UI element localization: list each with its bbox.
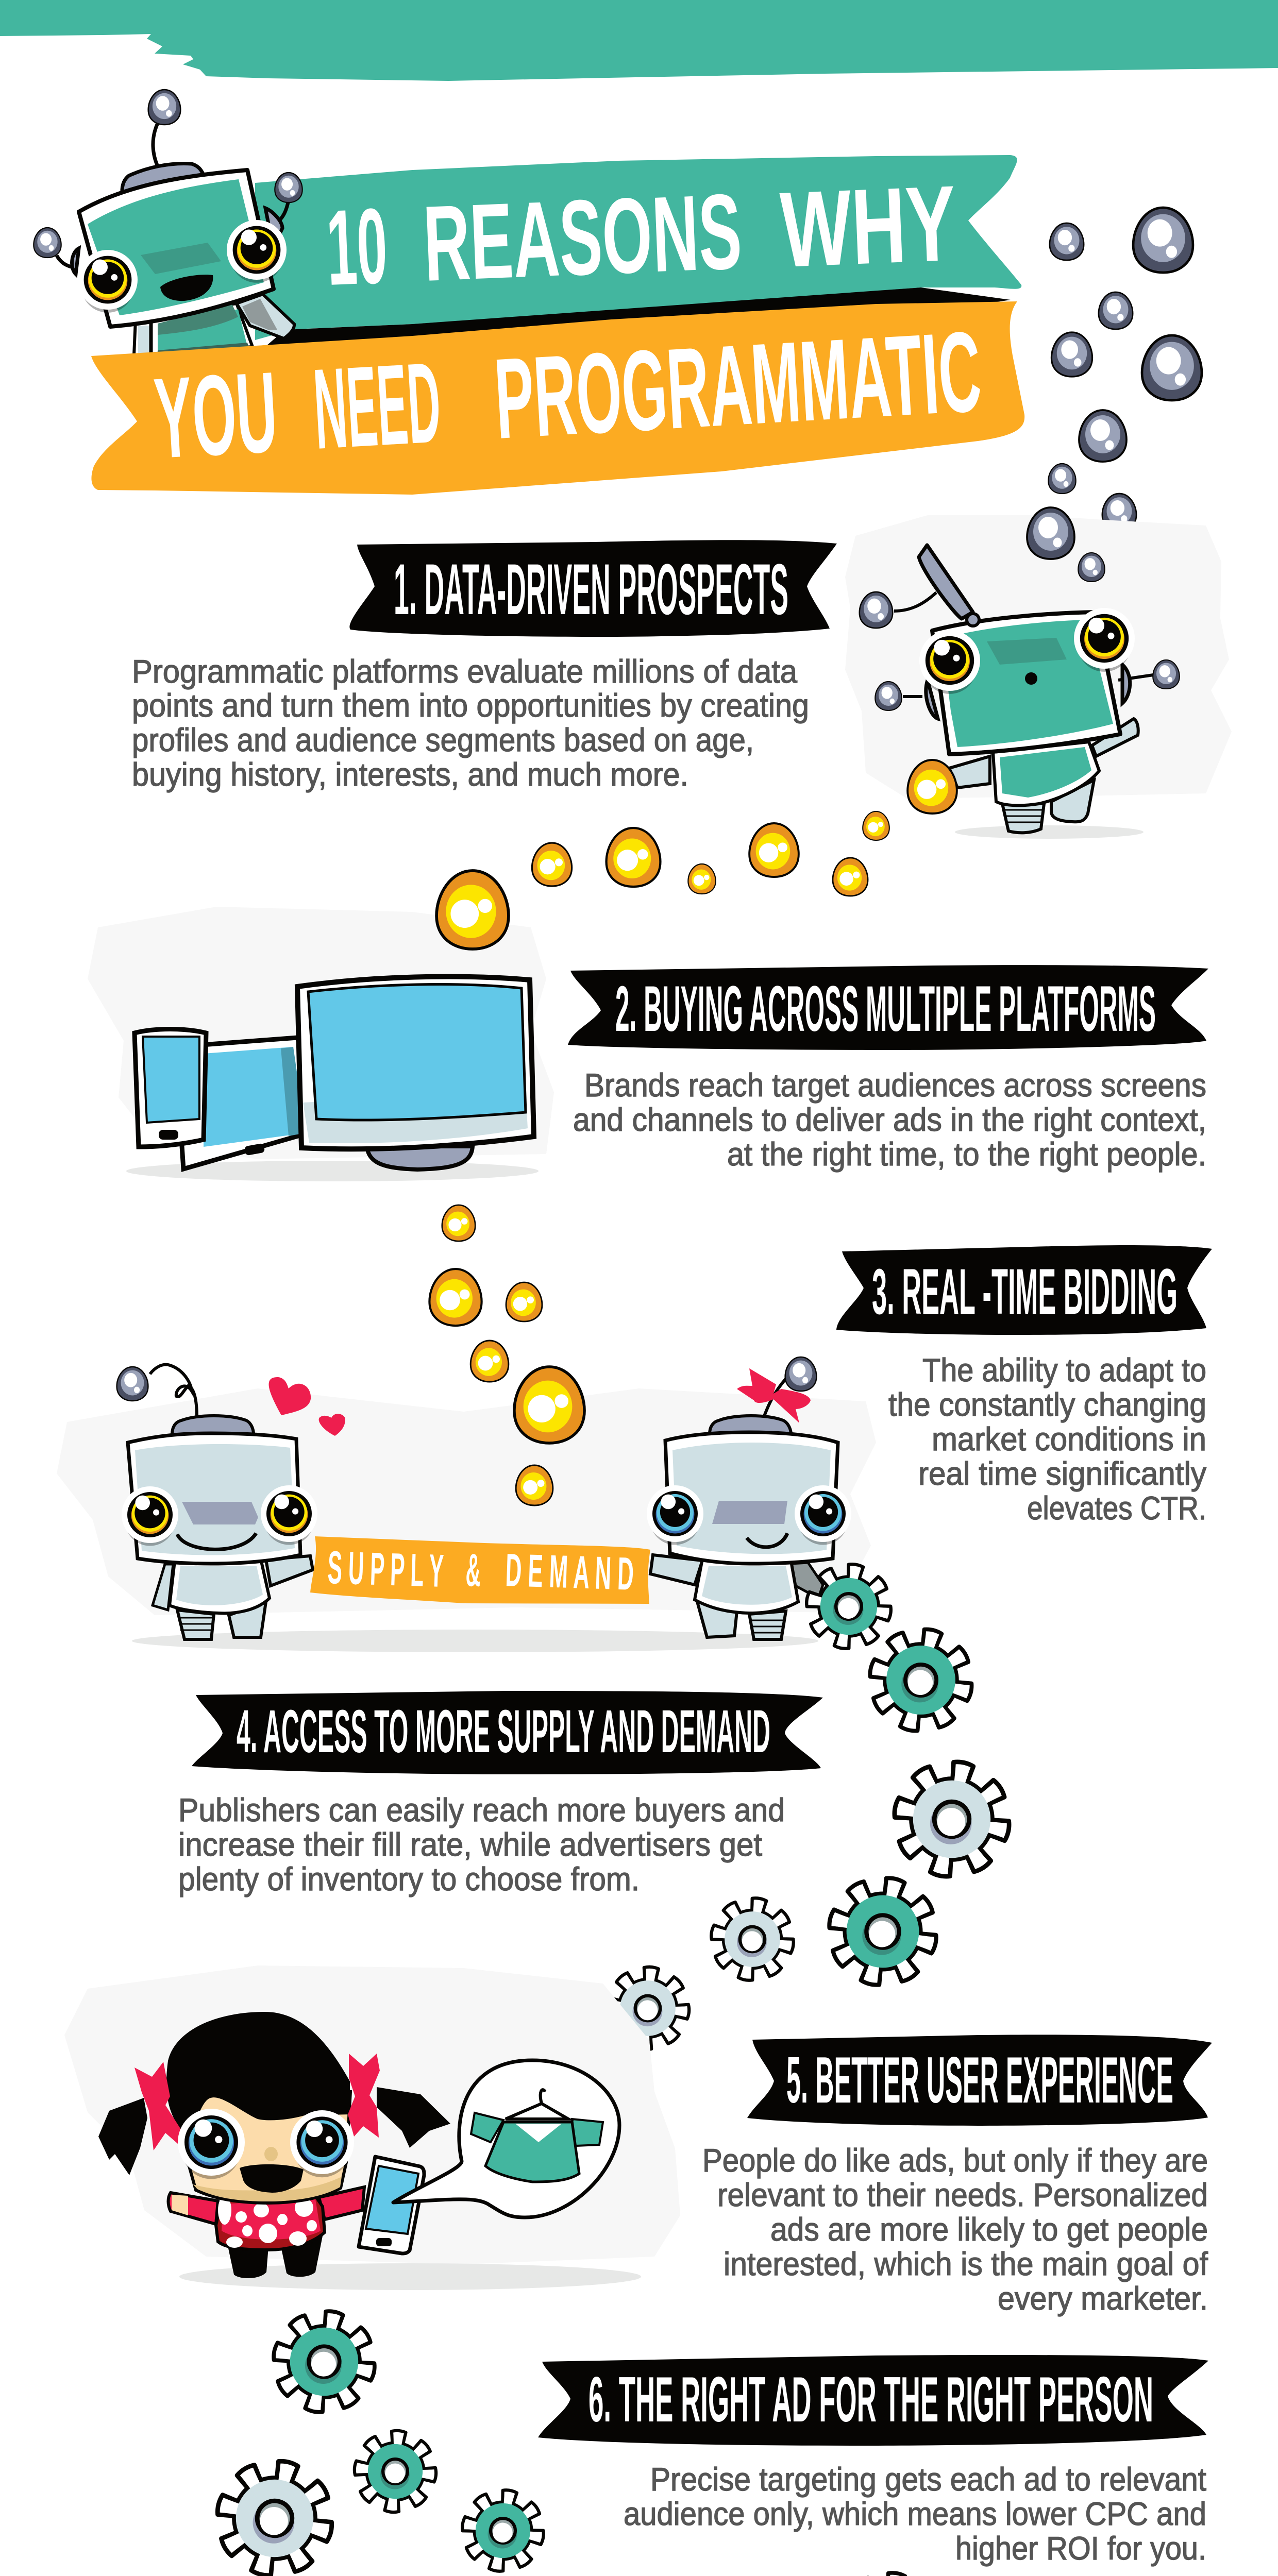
speech bubble <box>393 2060 619 2217</box>
body <box>134 303 253 355</box>
eyes <box>647 1485 703 1545</box>
body text <box>573 1067 1206 1173</box>
head <box>932 612 1120 754</box>
knob <box>967 614 979 626</box>
body text: audience only, which means lower CPC and <box>624 2496 1206 2532</box>
smooth leg <box>1051 780 1094 822</box>
bow <box>737 1368 811 1423</box>
title ribbon: you need programmatic <box>91 301 1024 495</box>
antenna <box>150 1365 197 1417</box>
left arm <box>168 2193 218 2224</box>
body text: points and turn them into opportunities by creating <box>132 688 809 724</box>
section 4: access to more supply and demand <box>178 1691 823 1897</box>
gold coin trail 1 <box>436 811 889 949</box>
tablet <box>175 1038 325 1169</box>
shadow <box>179 2263 641 2290</box>
banner <box>192 1691 823 1774</box>
smooth leg <box>229 1602 266 1637</box>
bubble <box>785 1357 816 1391</box>
threaded leg <box>177 1610 214 1639</box>
head <box>128 1433 300 1564</box>
section 2: buying across multiple platforms <box>568 965 1208 1173</box>
body <box>695 1559 798 1613</box>
robot mascot: title <box>33 90 302 355</box>
hearts <box>269 1377 311 1415</box>
antenna <box>764 1379 786 1417</box>
nose <box>264 2147 278 2161</box>
section 1: data-driven prospects <box>132 540 837 793</box>
blade antenna <box>919 545 973 619</box>
body text: profiles and audience segments based on age, <box>132 722 754 758</box>
shirt icon <box>471 2090 603 2182</box>
supply and demand banner: & <box>465 1545 481 1597</box>
devices illustration <box>126 977 539 1181</box>
title ribbon shadow <box>255 287 1011 361</box>
phone <box>359 2157 424 2253</box>
body text: People do like ads, but only if they are <box>702 2143 1208 2179</box>
title line two: YOU <box>151 348 280 483</box>
mouth <box>240 2164 304 2193</box>
banner <box>836 1245 1212 1335</box>
phone <box>134 1029 206 1147</box>
body text <box>132 654 809 793</box>
right arm <box>319 2187 364 2219</box>
gold coin trail 2 <box>429 1205 584 1505</box>
eyes <box>178 2109 245 2179</box>
smooth leg <box>697 1602 737 1637</box>
gray data bubbles <box>1048 208 1202 531</box>
body text <box>178 1792 785 1897</box>
banner <box>747 2035 1212 2126</box>
background blob: section 2 <box>88 907 554 1159</box>
body text: and channels to deliver ads in the right context, <box>573 1102 1206 1138</box>
threaded leg <box>749 1611 786 1639</box>
title line two: NEED <box>310 338 444 473</box>
shadow <box>126 1161 539 1181</box>
supply and demand banner <box>310 1536 650 1604</box>
hair <box>166 2012 350 2130</box>
body text <box>624 2462 1206 2567</box>
face <box>189 2092 350 2203</box>
body text: Publishers can easily reach more buyers and <box>178 1792 785 1828</box>
body text: Precise targeting gets each ad to relevant <box>650 2462 1206 2498</box>
arms <box>650 1555 702 1585</box>
body text: elevates CTR. <box>1027 1490 1206 1527</box>
body text: Brands reach target audiences across screens <box>584 1067 1206 1104</box>
body text: increase their fill rate, while advertisers get <box>178 1827 762 1863</box>
supply and demand banner: D E M A N D <box>505 1545 634 1600</box>
body text <box>702 2143 1208 2317</box>
connectors <box>894 592 1153 697</box>
title line one: WHY <box>778 164 959 290</box>
body text: real time significantly <box>918 1456 1206 1492</box>
eyes <box>122 1486 178 1546</box>
antennas <box>57 123 288 267</box>
top brush band <box>0 0 1278 81</box>
supply and demand banner: S U P P L Y <box>327 1542 444 1597</box>
dress <box>216 2196 325 2250</box>
pigtails <box>98 2098 147 2175</box>
title ribbon: 10 reasons why <box>255 155 1021 340</box>
girl with phone illustration <box>98 2012 641 2290</box>
body text <box>888 1352 1206 1527</box>
mouth <box>160 275 213 301</box>
shadow <box>955 825 1144 839</box>
section 3: real-time bidding <box>836 1245 1212 1527</box>
monitor <box>297 977 534 1149</box>
body <box>993 742 1099 805</box>
title line one: 10 <box>324 186 390 308</box>
ears <box>72 208 282 274</box>
body text: buying history, interests, and much more. <box>132 757 688 793</box>
robot: section 1 <box>860 545 1180 839</box>
smile <box>177 1533 256 1549</box>
background blob: section 1 <box>845 515 1232 799</box>
body text: The ability to adapt to <box>922 1352 1206 1388</box>
body text: ads are more likely to get people <box>770 2212 1208 2248</box>
robot with bow <box>647 1357 851 1639</box>
body text: relevant to their needs. Personalized <box>717 2177 1208 2213</box>
smile <box>747 1533 787 1547</box>
ears <box>926 665 1130 719</box>
dome <box>172 1416 254 1434</box>
antenna bubbles <box>148 90 180 125</box>
body text: the constantly changing <box>888 1387 1206 1423</box>
title line one: REASONS <box>421 172 744 304</box>
robot with heart <box>117 1365 345 1639</box>
arm <box>237 294 294 338</box>
eyes <box>919 630 980 694</box>
banner <box>349 540 837 637</box>
body <box>170 1559 270 1613</box>
dome <box>710 1416 791 1434</box>
dome <box>122 163 205 201</box>
threaded leg <box>1002 804 1044 833</box>
body text: at the right time, to the right people. <box>727 1137 1206 1173</box>
body text: plenty of inventory to choose from. <box>178 1861 640 1897</box>
body text: every marketer. <box>998 2281 1208 2317</box>
body text: market conditions in <box>932 1421 1206 1458</box>
bows <box>134 2062 181 2150</box>
body text: Programmatic platforms evaluate millions of data <box>132 654 798 690</box>
background blob: section 5 <box>64 1965 680 2264</box>
data bubbles over blob <box>1027 507 1105 582</box>
mouth <box>1025 672 1037 685</box>
bubble <box>117 1367 148 1401</box>
ground shadow: section 3 <box>132 1630 818 1652</box>
gear cluster 3 <box>831 2565 1085 2576</box>
head <box>79 170 274 327</box>
bubbles and coin <box>860 592 893 628</box>
background blob: section 3 <box>57 1388 876 1615</box>
title line two <box>151 308 984 483</box>
stand <box>367 1146 473 1170</box>
section 6: the right ad for the right person <box>538 2355 1208 2567</box>
gear cluster 2 <box>205 2301 550 2576</box>
gear trail 1 <box>603 1557 1020 2053</box>
eyes <box>78 250 138 313</box>
head <box>665 1432 838 1564</box>
banner <box>538 2355 1208 2446</box>
body text: interested, which is the main goal of <box>724 2246 1208 2282</box>
section 5: better user experience <box>702 2035 1212 2317</box>
arms <box>153 1564 173 1610</box>
legs <box>227 2241 268 2278</box>
arms <box>949 756 990 788</box>
body text: higher ROI for you. <box>955 2531 1206 2567</box>
